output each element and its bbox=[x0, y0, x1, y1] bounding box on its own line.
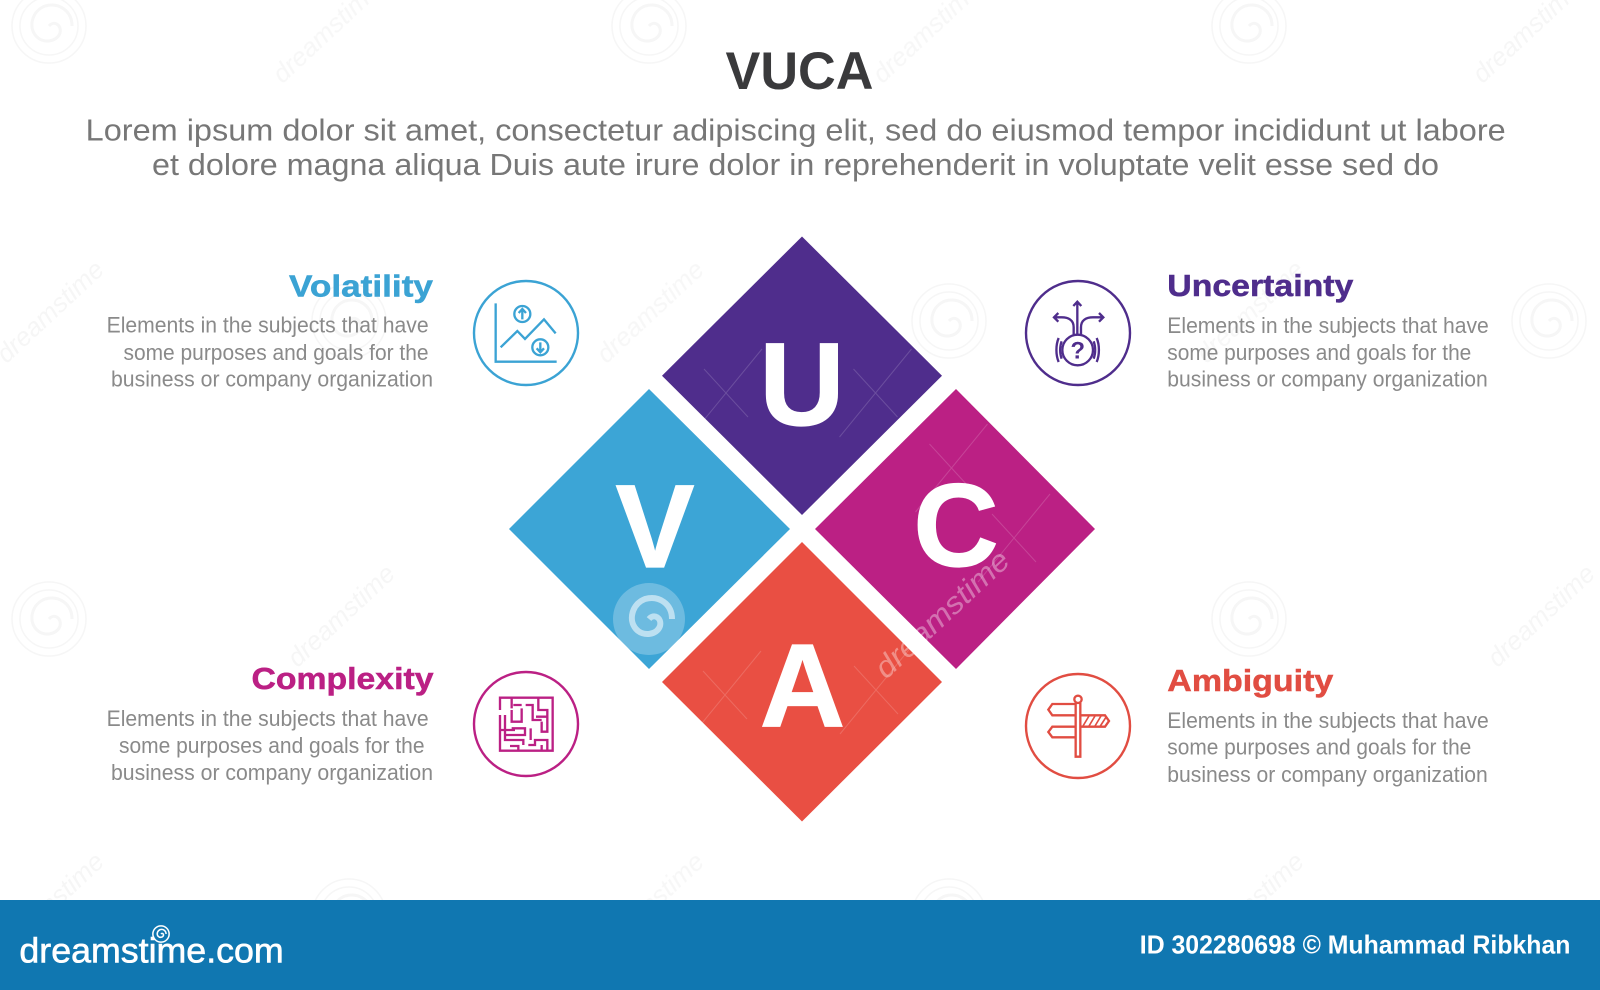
text block: Complexity description: Elements in the subjects that have bbox=[107, 706, 429, 731]
text block: Volatility description: Elements in the subjects that have bbox=[107, 312, 429, 338]
segment: U purple: U bbox=[759, 319, 845, 451]
segment: C magenta: C bbox=[913, 460, 999, 592]
text block: Complexity description: business or company organization bbox=[111, 760, 433, 785]
text block: Volatility description: business or company organization bbox=[111, 367, 433, 392]
text block: Complexity description bbox=[107, 706, 433, 785]
subtitle bbox=[86, 114, 1506, 182]
subtitle: Lorem ipsum dolor sit amet, consectetur adipiscing elit, sed do eiusmod tempor incididunt ut labore bbox=[86, 114, 1506, 148]
diamond matrix bbox=[509, 236, 1095, 822]
text block: Uncertainty description: Elements in the subjects that have bbox=[1167, 313, 1489, 338]
text block: Volatility description bbox=[107, 312, 433, 392]
watermark pattern: dreamstime bbox=[1190, 254, 1310, 369]
heading: Complexity: Complexity bbox=[252, 661, 434, 696]
footer logo: dreamstime.com bbox=[19, 932, 284, 970]
title: VUCA bbox=[726, 42, 874, 101]
icon: question mark with diverging arrows bbox=[1026, 281, 1130, 385]
panel: Complexity bbox=[107, 661, 578, 785]
icon: signpost bbox=[1026, 674, 1130, 778]
text block: Uncertainty description: business or company organization bbox=[1167, 367, 1488, 392]
text block: Complexity description: some purposes and goals for the bbox=[119, 733, 424, 758]
watermark pattern: dreamstime bbox=[281, 558, 401, 673]
icon: question mark with diverging arrows: ? bbox=[1070, 337, 1085, 364]
footer bar bbox=[0, 900, 1600, 990]
heading: Volatility: Volatility bbox=[289, 268, 434, 304]
segment: C magenta bbox=[815, 389, 1095, 669]
text block: Volatility description: some purposes and goals for the bbox=[124, 340, 428, 365]
text block: Ambiguity description: Elements in the subjects that have bbox=[1167, 708, 1489, 733]
watermark pattern: dreamstime bbox=[590, 846, 710, 961]
subtitle: et dolore magna aliqua Duis aute irure dolor in reprehenderit in voluptate velit esse sed do bbox=[152, 148, 1439, 182]
panel: Ambiguity bbox=[1026, 663, 1489, 787]
central watermark: dreamstime bbox=[868, 544, 1017, 685]
heading: Ambiguity: Ambiguity bbox=[1167, 663, 1334, 698]
text block: Ambiguity description: business or company organization bbox=[1167, 762, 1488, 787]
watermark pattern: dreamstime bbox=[1481, 558, 1600, 673]
segment: V blue: V bbox=[616, 461, 694, 593]
watermark pattern: dreamstime bbox=[1190, 846, 1310, 961]
text block: Ambiguity description bbox=[1167, 708, 1489, 787]
text block: Uncertainty description bbox=[1167, 313, 1489, 392]
segment: A red bbox=[662, 542, 942, 822]
panel: Volatility bbox=[107, 268, 578, 392]
text block: Uncertainty description: some purposes and goals for the bbox=[1167, 340, 1471, 365]
icon: line chart with up and down arrows bbox=[474, 281, 578, 385]
segment: U purple bbox=[662, 236, 942, 515]
footer credit: ID 302280698 © Muhammad Ribkhan bbox=[1140, 929, 1570, 959]
icon: maze bbox=[474, 672, 578, 776]
segment: A red: A bbox=[760, 620, 845, 752]
heading: Uncertainty: Uncertainty bbox=[1167, 268, 1354, 303]
text block: Ambiguity description: some purposes and goals for the bbox=[1167, 734, 1471, 760]
watermark pattern: dreamstime bbox=[590, 254, 710, 369]
segment: V blue bbox=[509, 389, 790, 669]
panel: Uncertainty bbox=[1026, 268, 1489, 392]
